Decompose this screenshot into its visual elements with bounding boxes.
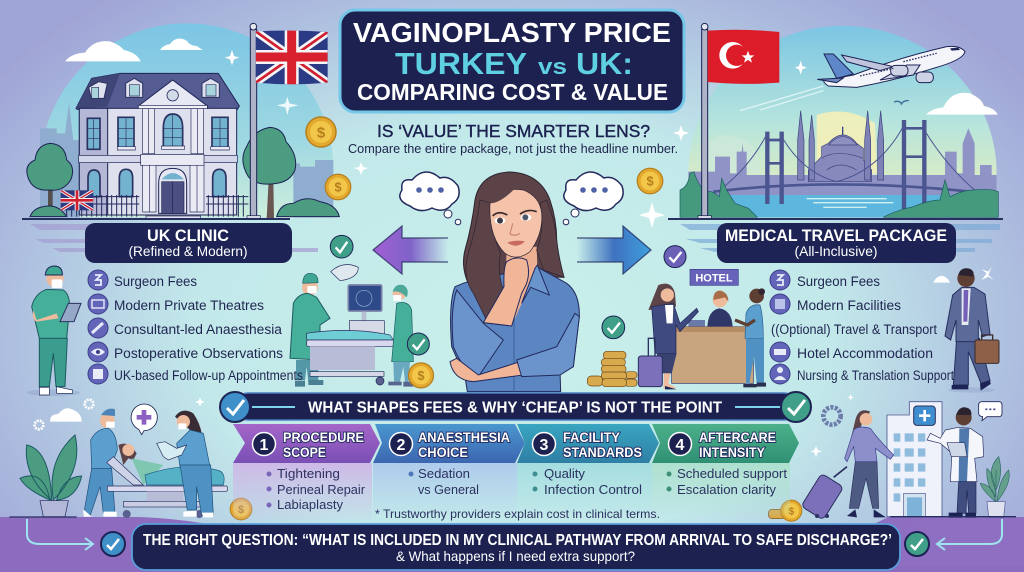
- right question banner: [132, 524, 900, 570]
- woman with suitcase: [801, 410, 894, 520]
- arrow pointing left: [373, 226, 448, 274]
- patient on bed: [107, 444, 227, 518]
- title line 2: vs: [538, 54, 567, 79]
- scene: traveller, hospital and doctor: [769, 394, 1016, 521]
- ground line and stripes, left: [22, 218, 290, 220]
- receptionist: [688, 291, 733, 327]
- factor panel 3: 3: [540, 437, 549, 454]
- connector check left: [101, 532, 125, 556]
- what shapes fees header bar: [220, 392, 811, 422]
- operating theatre equipment: [307, 235, 433, 388]
- bridge: [713, 120, 980, 213]
- factor panel 3: Infection Control: [544, 482, 642, 497]
- speech bubble: [979, 402, 1002, 421]
- crossed arm: [450, 358, 523, 382]
- tree right: [243, 127, 296, 218]
- second nurse: [157, 411, 213, 517]
- right check: [781, 392, 811, 422]
- plant: [20, 435, 82, 517]
- doctor: [927, 407, 984, 518]
- factor panel 1: 1: [260, 437, 269, 454]
- connector arrow left: [27, 519, 93, 550]
- factor panel 3: FACILITY: [563, 429, 621, 445]
- factor panel 3: [517, 424, 659, 515]
- small union flag on fence: [61, 190, 93, 210]
- plus speech bubble: [131, 404, 157, 435]
- factor panel 4: 4: [676, 437, 685, 454]
- coins stack and suitcase by hotel: [587, 316, 662, 387]
- scene: surgeon clipboard and list figure: [27, 266, 330, 396]
- factor panel 1: Labiaplasty: [277, 497, 343, 512]
- airplane: [817, 46, 965, 87]
- back hair: [463, 172, 564, 320]
- hotel sign: HOTEL: [695, 272, 733, 284]
- list text UK: [114, 274, 303, 383]
- connector check right: [905, 532, 929, 556]
- panel heading: medical travel: [717, 223, 956, 263]
- neck: [505, 247, 537, 318]
- list text travel: [771, 274, 954, 383]
- check badge: [407, 333, 429, 355]
- factor panel 2: CHOICE: [418, 444, 468, 460]
- shirt: [451, 267, 579, 392]
- list icons travel: [770, 270, 790, 384]
- scene: UK clinic building: [27, 23, 339, 219]
- list text travel: Nursing & Translation Support: [797, 368, 954, 383]
- gears and cloud: [35, 397, 205, 429]
- list text UK: UK-based Follow-up Appointments: [114, 368, 303, 383]
- surgeon at table: [290, 273, 330, 387]
- factor panel 4: Escalation clarity: [677, 482, 776, 497]
- panel heading: UK clinic: UK CLINIC: [147, 226, 229, 245]
- nurse receptionist: [735, 288, 766, 387]
- list text travel: Surgeon Fees: [797, 274, 880, 289]
- businesswoman left: [648, 284, 698, 389]
- hospital: [887, 402, 942, 517]
- arrow pointing right: [577, 226, 651, 274]
- factor panel 1: Tightening: [277, 466, 340, 481]
- list text UK: Surgeon Fees: [114, 274, 197, 289]
- factor panel 1: PROCEDURE: [283, 429, 364, 445]
- factor panel 3: STANDARDS: [563, 444, 642, 460]
- factor panel 2: [373, 424, 525, 515]
- water: [713, 195, 973, 217]
- iron fences: [65, 195, 248, 217]
- face: [490, 189, 542, 257]
- panel heading: UK clinic: (Refined & Modern): [128, 244, 248, 259]
- list: UK clinic items: [85, 223, 303, 384]
- panel heading: medical travel: MEDICAL TRAVEL PACKAGE: [725, 226, 947, 245]
- far city: [688, 128, 997, 217]
- check badge purple: [664, 246, 686, 268]
- factor panel 3: Quality: [544, 466, 585, 481]
- first nurse: [83, 409, 117, 517]
- assistant nurse: [388, 285, 413, 387]
- panel heading: medical travel: (All-Inclusive): [794, 244, 878, 259]
- factor panel 2: ANAESTHESIA: [418, 429, 510, 445]
- factor panel 4: Scheduled support: [677, 466, 787, 481]
- potted plant: [980, 457, 1009, 517]
- connector arrow right: [937, 519, 1002, 550]
- coins around title: [306, 117, 663, 200]
- footnote: * Trustworthy providers explain cost in clinical terms.: [375, 507, 660, 521]
- shore trees: [680, 172, 998, 217]
- factor panel 1: SCOPE: [283, 444, 326, 460]
- hotel sign: [690, 269, 738, 285]
- coin stack: [587, 351, 637, 387]
- facial features: [493, 210, 537, 246]
- thought bubble left: [400, 172, 461, 225]
- woman thinking: [450, 172, 579, 392]
- coin near chevrons: [230, 498, 252, 520]
- contrails, bird, cloud and sparkle: [740, 61, 998, 115]
- heading text: WHAT SHAPES FEES & WHY ‘CHEAP’ IS NOT THE POINT: [308, 400, 723, 416]
- thought bubble right: [563, 172, 623, 225]
- follow up text: & What happens if I need extra support?: [396, 548, 635, 564]
- factor panel 2: vs General: [418, 482, 479, 497]
- list text UK: Consultant-led Anaesthesia: [114, 322, 282, 337]
- scene: Istanbul skyline and plane: [680, 23, 998, 219]
- factor panel 4: AFTERCARE: [699, 429, 776, 445]
- reception desk: [670, 327, 755, 383]
- title line 2: [395, 46, 633, 81]
- title line 2: UK:: [576, 46, 633, 81]
- question text: THE RIGHT QUESTION: “WHAT IS INCLUDED IN MY CLINICAL PATHWAY FROM ARRIVAL TO SAFE DISCHARGE?’: [143, 532, 892, 549]
- coins on ground: [769, 500, 802, 521]
- flagpole and UK flag: [247, 23, 328, 219]
- nurse with tablet: [27, 266, 81, 396]
- title line 2: TURKEY: [395, 46, 527, 81]
- list text travel: Modern Facilities: [797, 298, 901, 313]
- house body: [76, 73, 239, 219]
- mosque: [798, 111, 884, 182]
- man with briefcase: [933, 267, 999, 393]
- factor panel 2: 2: [397, 437, 406, 454]
- ground line and stripes, right: [668, 218, 1003, 220]
- subheading: IS ‘VALUE’ THE SMARTER LENS?: [377, 121, 650, 141]
- factor panel 1: Perineal Repair: [277, 482, 366, 497]
- factor panel 2: Sedation: [418, 466, 470, 481]
- suitcase: [648, 338, 655, 357]
- scene: nurses with patient: [9, 397, 227, 518]
- bushes: [30, 199, 339, 217]
- list text travel: ((Optional) Travel & Transport: [771, 322, 937, 337]
- left check: [220, 392, 250, 422]
- title line 3: COMPARING COST & VALUE: [357, 79, 668, 105]
- tree left: [27, 143, 73, 213]
- title block: [340, 10, 684, 112]
- list: travel package items: [717, 223, 956, 384]
- arm and hand at chin: [483, 258, 529, 326]
- factor panels: [233, 424, 799, 520]
- gear: [823, 407, 841, 425]
- scene: hotel reception and travel package: [648, 246, 999, 393]
- purple bottom band: [0, 517, 1024, 572]
- check badge: [602, 316, 625, 339]
- factor panel 4: INTENSITY: [699, 444, 766, 460]
- panel heading: UK clinic: [85, 223, 292, 263]
- list text UK: Postoperative Observations: [114, 346, 283, 361]
- list text UK: Modern Private Theatres: [114, 298, 264, 313]
- flagpole and Turkish flag: [698, 23, 779, 219]
- list icons UK: [88, 270, 108, 384]
- front hair locks: [466, 200, 503, 321]
- check badge: [330, 235, 353, 258]
- factor panel 4: [652, 424, 799, 515]
- subheading note: Compare the entire package, not just the headline number.: [348, 141, 678, 156]
- sparkles: [354, 125, 689, 228]
- title line 1: VAGINOPLASTY PRICE: [353, 17, 671, 48]
- list text travel: Hotel Accommodation: [797, 346, 933, 361]
- factor panel 1: [233, 424, 380, 520]
